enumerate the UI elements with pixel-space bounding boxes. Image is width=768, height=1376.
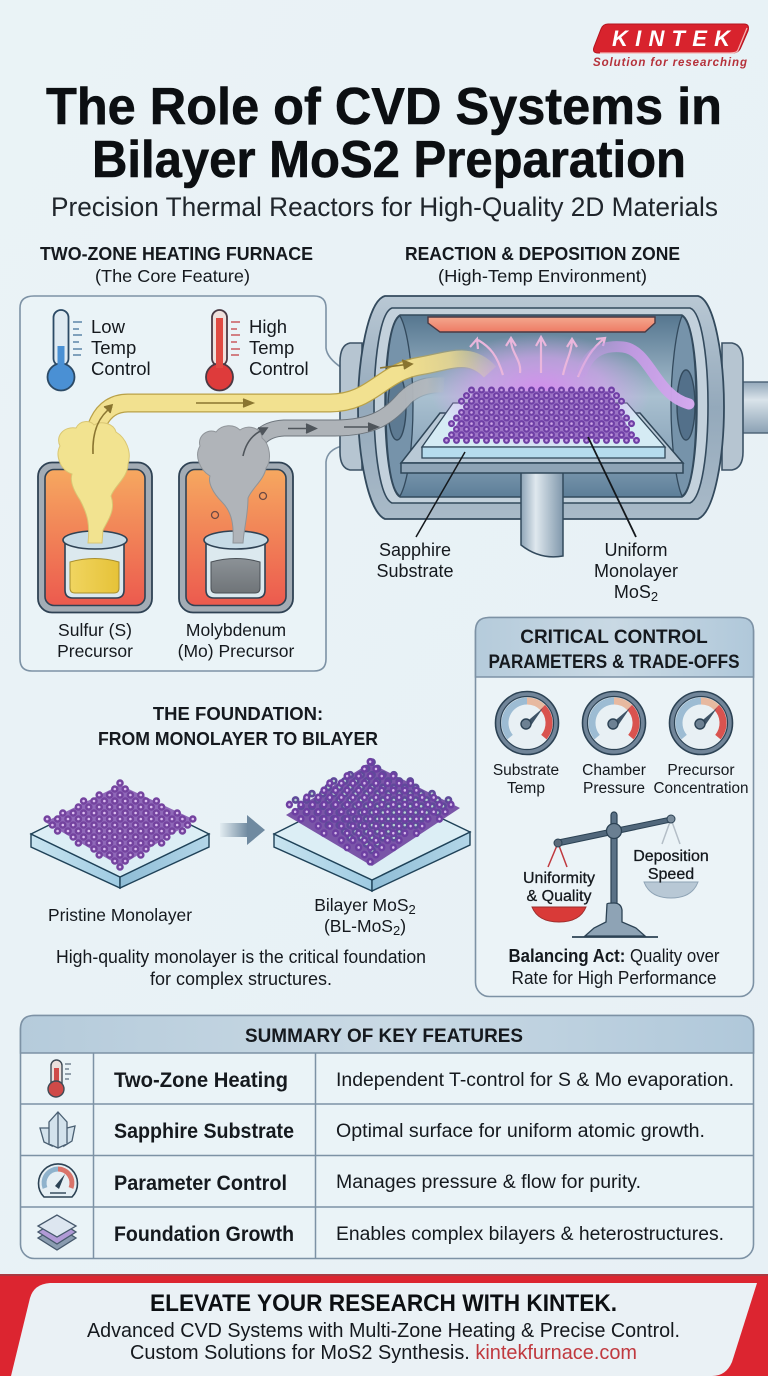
gauge: substrate temp [496, 692, 558, 754]
label: high temp control: Control [249, 358, 309, 379]
icon: gauge [39, 1164, 78, 1197]
table heading: SUMMARY OF KEY FEATURES [245, 1025, 523, 1047]
thermometer: low temp [48, 310, 82, 390]
subtitle: Precision Thermal Reactors for High-Quality 2D Materials [51, 192, 718, 222]
end caps [386, 316, 696, 496]
title: The Role of CVD Systems in [46, 78, 722, 136]
smoke [58, 422, 129, 543]
inner wall [374, 308, 708, 503]
label: bilayer MoS2: 2 [393, 923, 400, 938]
diagram: bilayer slab [274, 762, 470, 891]
heading: the foundation [98, 703, 378, 749]
label: uniform monolayer MoS2: Monolayer [594, 561, 678, 581]
label: bilayer MoS2: 2 [409, 902, 416, 917]
smoke [198, 426, 269, 543]
row text: two-zone heating: Independent T-control for S & Mo evaporation. [336, 1070, 734, 1091]
label: molybdenum precursor: (Mo) Precursor [178, 641, 295, 661]
label: uniform monolayer MoS2 [594, 540, 678, 604]
icon: thermometer [48, 1060, 71, 1097]
flow arrows [243, 423, 378, 456]
gauge labels: Temp [507, 780, 545, 797]
label: high temp control: Temp [249, 337, 294, 358]
beaker: molybdenum [204, 531, 268, 598]
label: bilayer MoS2: (BL-MoS [324, 916, 393, 936]
underlay [286, 763, 460, 866]
label: uniform monolayer MoS2: MoS [614, 582, 651, 602]
pipe fill [92, 359, 490, 470]
arrow: monolayer to bilayer [220, 815, 265, 845]
footer text: Advanced CVD Systems with Multi-Zone Heating & Precise Control. [87, 1320, 680, 1342]
gauge labels [493, 762, 748, 797]
label: low temp control: Temp [91, 337, 136, 358]
row text: parameter control: Manages pressure & flow for purity. [336, 1172, 641, 1193]
heading: CRITICAL CONTROL [520, 627, 708, 648]
sapphire substrate [422, 403, 665, 458]
panel: critical control parameters [476, 618, 754, 996]
exhaust vapour [582, 347, 689, 404]
label: sapphire substrate: Substrate [376, 561, 454, 581]
platform [401, 413, 683, 473]
thermometer: high temp [206, 310, 240, 390]
label: sulfur precursor: Precursor [57, 641, 133, 661]
row label: two-zone heating: Two-Zone Heating [114, 1069, 288, 1092]
icon: crystal [40, 1112, 75, 1148]
scale labels: Uniformity [523, 870, 595, 887]
caption [508, 946, 720, 988]
heading [488, 627, 740, 673]
heading: two-zone heating furnace [40, 243, 313, 286]
scale labels [523, 848, 709, 905]
rising arrows [470, 337, 605, 377]
panel: two-zone furnace [20, 296, 342, 671]
row text: sapphire substrate: Optimal surface for uniform atomic growth. [336, 1121, 705, 1142]
heading: the foundation: FROM MONOLAYER TO BILAYER [98, 728, 378, 749]
heading: the foundation: THE FOUNDATION: [153, 703, 323, 724]
logo: KINTEK [593, 24, 748, 69]
title: Bilayer MoS2 Preparation [92, 131, 686, 189]
row label: foundation growth: Foundation Growth [114, 1223, 294, 1246]
label: bilayer MoS2: Bilayer MoS [314, 895, 409, 915]
plasma glow [431, 334, 651, 450]
label: low temp control: Control [91, 358, 151, 379]
scale labels: Deposition [633, 848, 709, 865]
beaker: sulfur [63, 531, 127, 598]
gauge: precursor concentration [670, 692, 732, 754]
oven: molybdenum [179, 462, 293, 612]
label: uniform monolayer MoS2: 2 [651, 589, 658, 604]
heater [428, 317, 655, 332]
vapour flow: molybdenum [198, 385, 444, 543]
right outlet pipe [738, 382, 768, 433]
gauge labels: Precursor [667, 762, 735, 779]
label: bilayer MoS2 [314, 895, 416, 938]
label: sulfur precursor: Sulfur (S) [58, 620, 132, 640]
table header [20, 1016, 754, 1053]
label: sapphire substrate [376, 540, 454, 581]
footer link text: Custom Solutions for MoS2 Synthesis. kintekfurnace.com [130, 1342, 637, 1364]
monolayer MoS2 [446, 390, 637, 440]
upper layer atoms [289, 762, 451, 862]
logo: KINTEK: Solution for researching [593, 57, 747, 69]
barrel shell [358, 296, 724, 519]
pipe fill [250, 385, 444, 465]
label: pristine monolayer: Pristine Monolayer [48, 905, 192, 925]
leader line: monolayer [588, 437, 636, 537]
flow arrows [93, 360, 412, 454]
inlet port [388, 374, 406, 440]
lower layer atoms [296, 762, 449, 850]
heading: reaction and deposition zone: REACTION & DEPOSITION ZONE [405, 243, 680, 264]
footer banner [0, 1275, 768, 1376]
text: foundation note: for complex structures. [150, 969, 332, 989]
label: bilayer MoS2: ) [400, 916, 406, 936]
balance scale [532, 812, 698, 937]
label: sapphire substrate: Sapphire [379, 540, 451, 560]
row label: sapphire substrate: Sapphire Substrate [114, 1120, 294, 1143]
panel header [476, 618, 754, 677]
atoms [45, 783, 195, 867]
support leg [521, 470, 563, 557]
chamber interior [385, 315, 697, 497]
scale labels: & Quality [527, 888, 591, 905]
label: molybdenum precursor [178, 620, 295, 661]
gauge labels: Substrate [493, 762, 559, 779]
caption: Rate for High Performance [512, 968, 716, 988]
row text: foundation growth: Enables complex bilayers & heterostructures. [336, 1224, 724, 1245]
gauge labels: Pressure [583, 780, 645, 797]
label: uniform monolayer MoS2: Uniform [604, 540, 668, 560]
logo: KINTEK: KINTEK [612, 26, 732, 51]
pipe outline [250, 385, 444, 465]
label: high temp control: High [249, 316, 287, 337]
heading: two-zone heating furnace: TWO-ZONE HEATING FURNACE [40, 243, 313, 264]
label: high temp control [249, 316, 309, 379]
label: low temp control [91, 316, 151, 379]
heading: PARAMETERS & TRADE-OFFS [488, 652, 740, 673]
heading: reaction and deposition zone: (High-Temp Environment) [438, 266, 647, 286]
oven: sulfur [38, 462, 152, 612]
diagram: monolayer slab [31, 783, 209, 888]
label: sulfur precursor [57, 620, 133, 661]
scale labels: Speed [648, 866, 694, 883]
heading: two-zone heating furnace: (The Core Feature) [95, 266, 250, 286]
gauge labels: Chamber [582, 762, 646, 779]
caption: Balancing Act: Quality over [508, 946, 720, 966]
panel: summary of key features [20, 1016, 754, 1258]
label: low temp control: Low [91, 316, 126, 337]
footer heading: ELEVATE YOUR RESEARCH WITH KINTEK. [150, 1290, 617, 1317]
icon: layers [38, 1215, 76, 1250]
leader line: sapphire [416, 452, 465, 537]
flanges [340, 343, 743, 470]
text: foundation note: High-quality monolayer is the critical foundation [56, 947, 426, 967]
title [46, 78, 722, 189]
heading: reaction and deposition zone [405, 243, 680, 286]
vapour flow: sulfur [58, 359, 490, 543]
furnace: reaction chamber [340, 296, 768, 557]
gauge: chamber pressure [582, 692, 646, 754]
row label: parameter control: Parameter Control [114, 1172, 287, 1195]
outlet port [677, 370, 695, 440]
label: molybdenum precursor: Molybdenum [186, 620, 286, 640]
text: foundation note [56, 947, 426, 989]
gauge labels: Concentration [654, 780, 748, 797]
pipe outline [92, 359, 490, 470]
